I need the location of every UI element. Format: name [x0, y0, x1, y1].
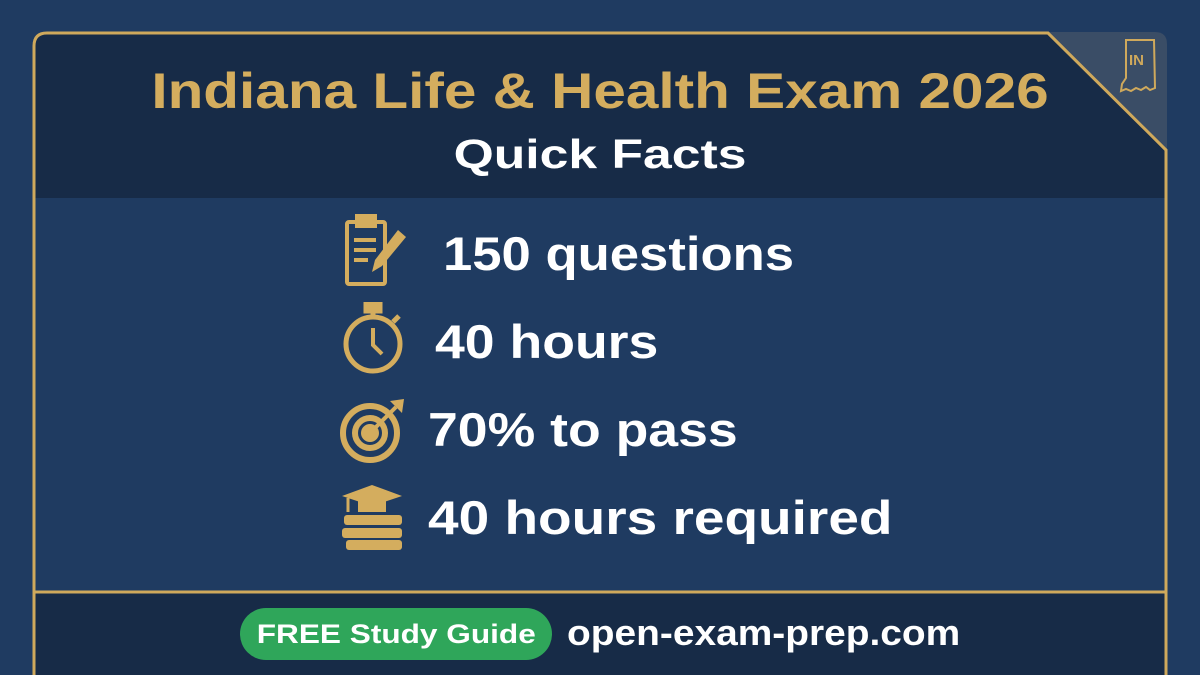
text: questions: 150 questions [443, 227, 794, 280]
footer button: FREE Study Guide: FREE Study Guide [256, 619, 536, 649]
footer url: open-exam-prep.com [567, 612, 960, 653]
footer panel [33, 592, 1167, 675]
text: hours: 40 hours [435, 315, 658, 368]
text: required: 40 hours required [428, 491, 892, 544]
icon: Indiana state [1121, 40, 1155, 91]
corner triangle [1048, 32, 1167, 150]
icon: Indiana state: IN [1129, 52, 1144, 69]
header panel [33, 32, 1167, 198]
icon: clipboard [345, 214, 406, 286]
icon: stopwatch [344, 302, 402, 374]
footer button: FREE Study Guide [240, 608, 552, 660]
subtitle: Quick Facts [454, 131, 746, 177]
icon: books with cap [342, 485, 402, 550]
title: Indiana Life & Health Exam 2026 [151, 63, 1049, 119]
icon: target [340, 399, 404, 463]
text: pass: 70% to pass [428, 403, 738, 456]
